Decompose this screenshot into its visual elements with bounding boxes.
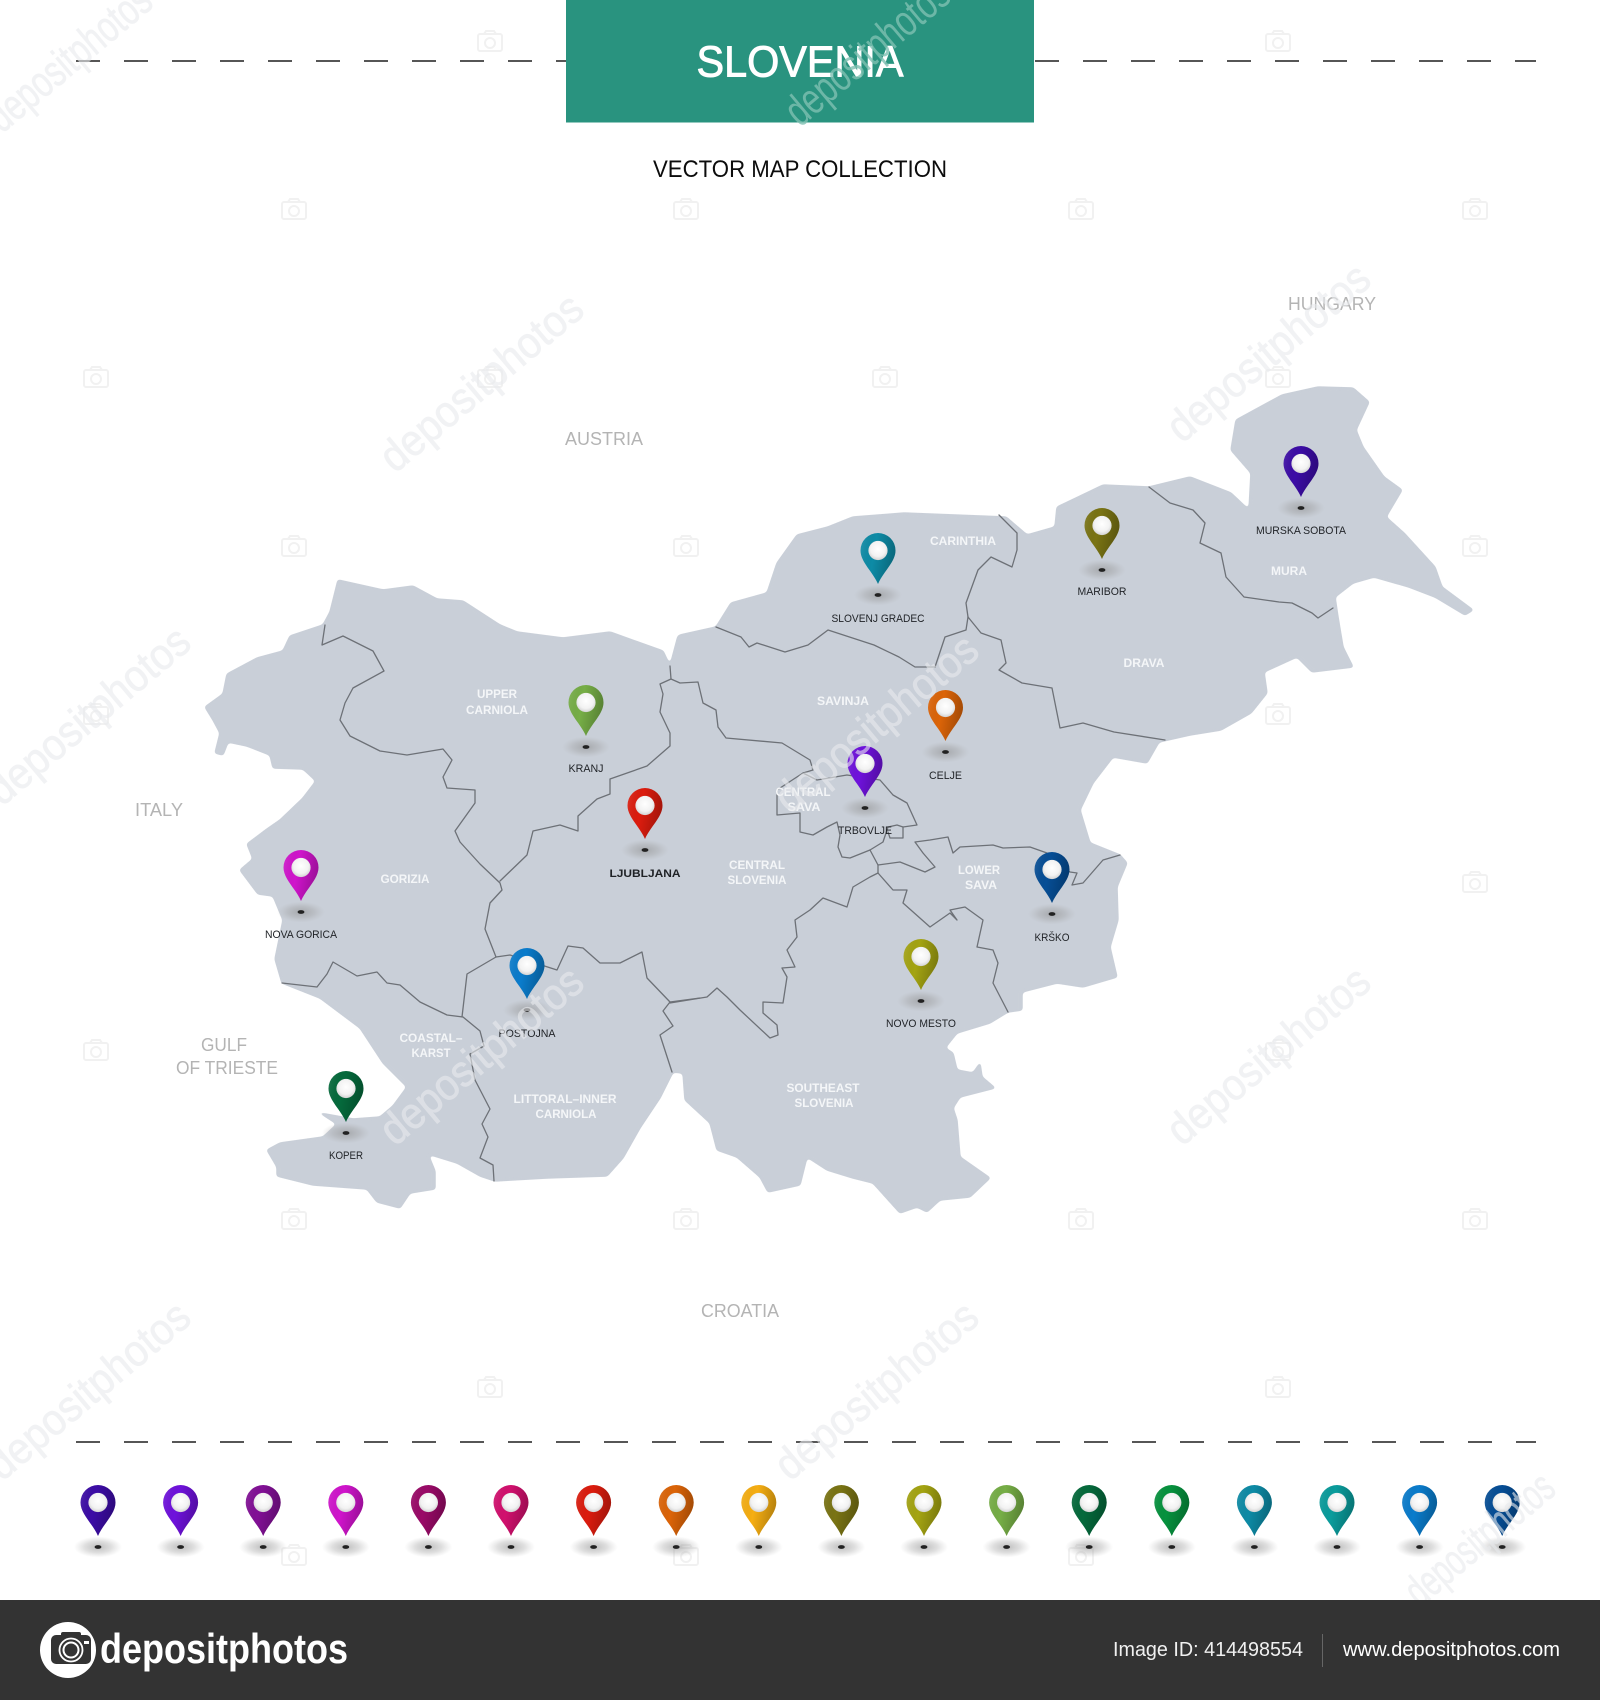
pin: Novo Mesto [886, 939, 956, 1030]
watermark text: depositphotos [1157, 956, 1380, 1155]
pin colour legend row [74, 1485, 1526, 1558]
pin: Krško [1028, 852, 1076, 944]
watermark camera icons [84, 31, 1487, 1565]
header banner [566, 0, 1034, 122]
pin: Postojna [498, 948, 556, 1040]
region labels: MURA [1271, 566, 1307, 578]
watermark text: depositphotos [765, 1291, 988, 1490]
pin: Ljubljana capital [610, 788, 681, 880]
neighbouring country labels: GULF [201, 1035, 247, 1055]
footer bar [0, 1600, 1600, 1700]
watermark text: depositphotos [370, 283, 593, 482]
pin: Maribor: MARIBOR [1078, 586, 1127, 598]
region labels: SAVINJA [817, 696, 869, 708]
pin: Celje [922, 690, 970, 782]
pin: Koper: KOPER [329, 1150, 363, 1162]
website: www.depositphotos.com [1342, 1638, 1560, 1661]
region labels: SOUTHEAST [786, 1083, 860, 1095]
pin: Koper [322, 1071, 370, 1162]
region labels: GORIZIA [380, 874, 430, 886]
neighbouring country labels: HUNGARY [1288, 294, 1376, 314]
country outline [205, 387, 1473, 1213]
region labels: SAVA [788, 802, 820, 814]
region labels: CARNIOLA [536, 1109, 596, 1121]
region labels: COASTAL– [400, 1033, 463, 1045]
pin: Trbovlje [838, 746, 892, 837]
pin: Slovenj Gradec [832, 533, 925, 625]
region labels: SLOVENIA [728, 875, 786, 887]
region labels: CENTRAL [729, 860, 785, 872]
region labels: CENTRAL [776, 787, 830, 799]
watermark text: depositphotos [370, 956, 593, 1155]
map of Slovenia [205, 387, 1473, 1213]
subtitle: VECTOR MAP COLLECTION [653, 156, 947, 183]
neighbouring country labels: AUSTRIA [565, 429, 643, 449]
pin: Novo Mesto: NOVO MESTO [886, 1018, 956, 1030]
title: SLOVENIA [696, 38, 904, 86]
pin: Murska Sobota [1256, 446, 1347, 537]
watermark text: depositphotos [765, 624, 988, 823]
pin: Nova Gorica [265, 850, 338, 941]
region labels: UPPER [477, 689, 518, 701]
region labels: SLOVENIA [794, 1098, 854, 1110]
pin: Krško: KRŠKO [1034, 931, 1070, 944]
region labels: DRAVA [1124, 658, 1164, 670]
region labels: CARNIOLA [466, 705, 528, 717]
neighbouring country labels: CROATIA [701, 1301, 779, 1321]
neighbouring country labels [135, 294, 1376, 1321]
pin: Maribor [1078, 508, 1127, 598]
region labels [380, 536, 1307, 1121]
region labels: KARST [412, 1048, 450, 1060]
pin: Trbovlje: TRBOVLJE [838, 825, 892, 837]
pin: Murska Sobota: MURSKA SOBOTA [1256, 525, 1347, 537]
pin: Ljubljana capital: LJUBLJANA [610, 868, 681, 880]
neighbouring country labels: ITALY [135, 800, 183, 820]
pin: Nova Gorica: NOVA GORICA [265, 929, 338, 941]
image id: Image ID: 414498554 [1113, 1638, 1303, 1661]
pin: Slovenj Gradec: SLOVENJ GRADEC [832, 613, 925, 625]
region labels: LOWER [958, 865, 1001, 877]
watermark text: depositphotos [1157, 253, 1380, 452]
icon: camera logo [40, 1622, 96, 1678]
logo wordmark: depositphotos [100, 1625, 348, 1672]
region labels: SAVA [965, 880, 997, 892]
pin: Kranj: KRANJ [568, 763, 604, 775]
neighbouring country labels: OF TRIESTE [176, 1058, 278, 1078]
pin: Postojna: POSTOJNA [498, 1028, 556, 1040]
pin: Celje: CELJE [929, 770, 962, 782]
region borders [282, 487, 1333, 1181]
region labels: CARINTHIA [930, 536, 996, 548]
pin: Kranj [562, 685, 610, 775]
region labels: LITTORAL–INNER [514, 1094, 617, 1106]
